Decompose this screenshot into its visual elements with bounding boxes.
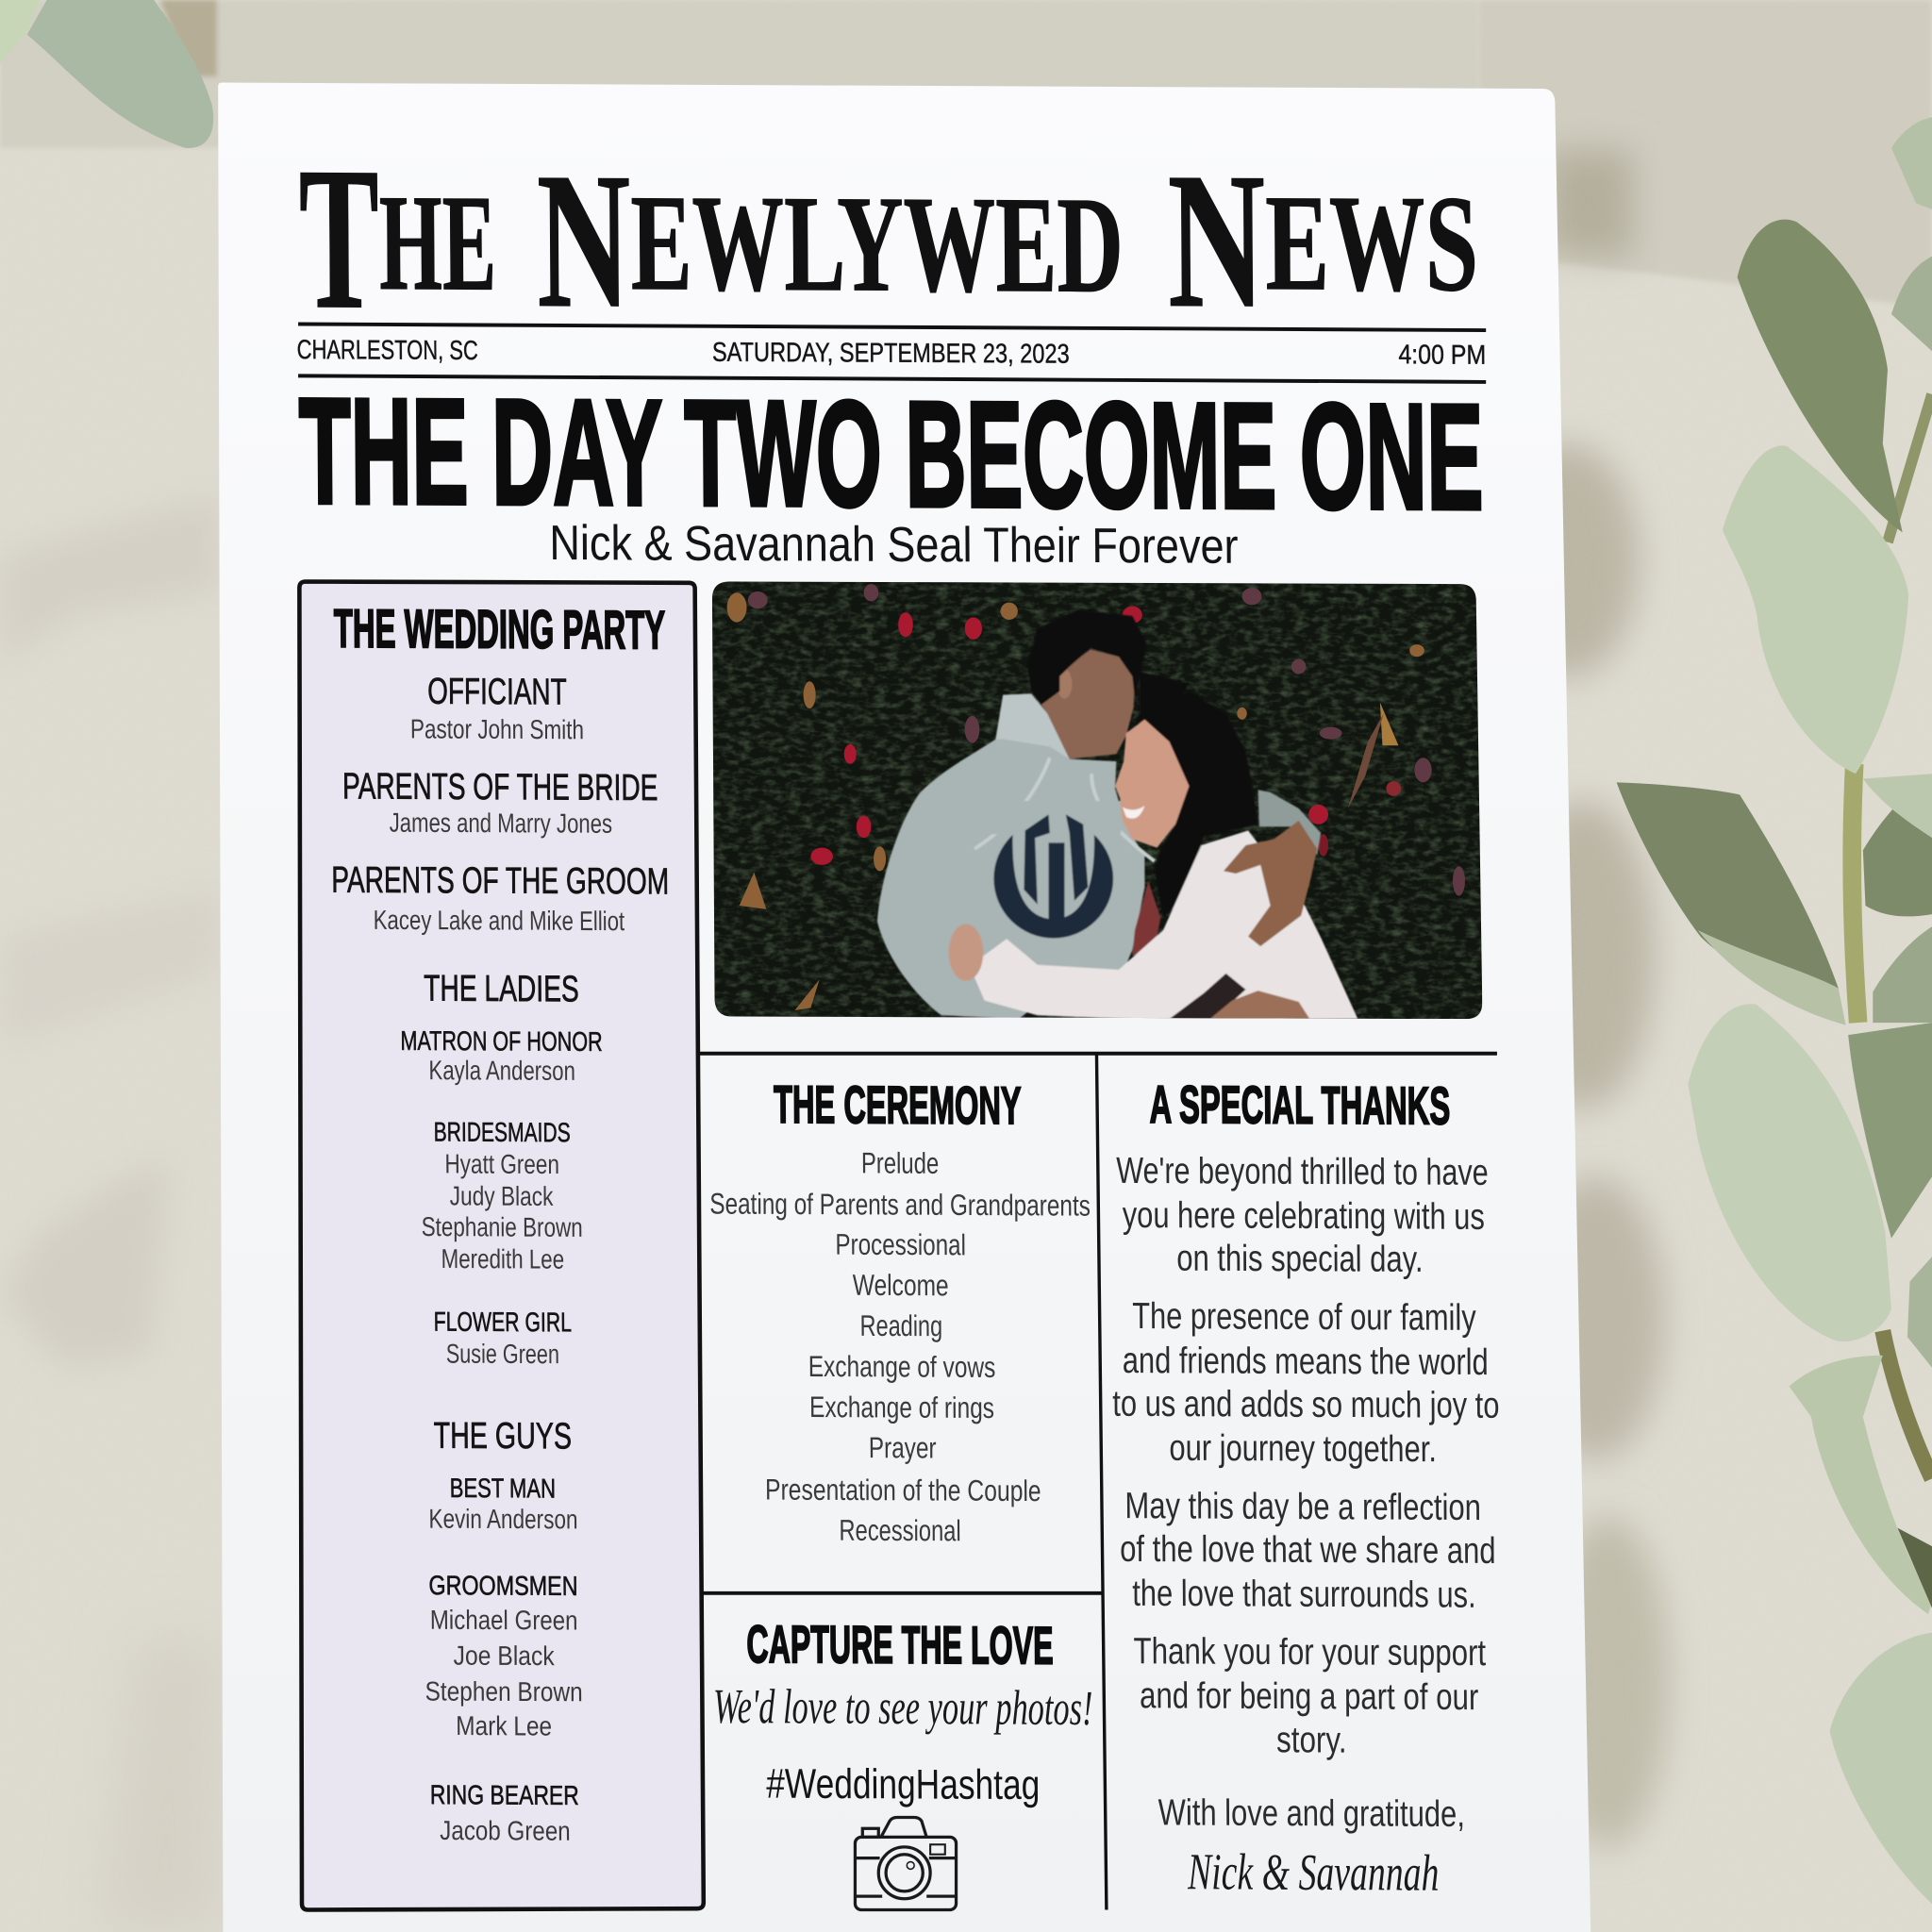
thanks paragraph 3: the love that surrounds us. [1132,1574,1476,1616]
sign-off: Nick & Savannah [1187,1842,1440,1902]
parents of the bride: PARENTS OF THE BRIDE [342,766,658,808]
man: grey hoodie [877,693,1144,1019]
ceremony order list: Presentation of the Couple [765,1474,1041,1507]
thanks paragraph 3: May this day be a reflection [1124,1486,1481,1528]
the guys: Kevin Anderson [428,1505,578,1535]
foliage: top-left leaf [0,0,217,148]
thanks paragraph 2 [1112,1296,1500,1470]
thanks paragraph 2: and friends means the world [1123,1341,1489,1383]
masthead title: N [536,132,631,348]
the ladies [400,969,603,1370]
parents of the bride: James and Marry Jones [390,808,612,840]
heading: capture the love: CAPTURE THE LOVE [746,1614,1054,1675]
ceremony order list: Prayer [869,1431,937,1465]
paper card [218,83,1591,1932]
ceremony order list [709,1146,1091,1547]
parents of the groom: PARENTS OF THE GROOM [331,860,669,902]
the guys: Michael Green [430,1606,578,1637]
the guys: Mark Lee [456,1711,552,1742]
dateline bar: 4:00 PM [1398,340,1486,371]
panel: the wedding party [299,581,704,1909]
the guys: Jacob Green [440,1816,571,1847]
woman: face [1115,720,1189,848]
heading: the ceremony: THE CEREMONY [774,1074,1022,1135]
scarf [1132,881,1160,957]
ceremony order list: Exchange of vows [808,1350,995,1384]
thanks paragraph 4 [1133,1631,1486,1761]
masthead title: HE [378,166,497,320]
dress detail [1170,974,1245,1019]
column rules [700,1054,1497,1909]
the guys: THE GUYS [434,1416,572,1457]
panel: a special thanks [1112,1074,1500,1902]
the guys: RING BEARER [430,1780,579,1811]
thanks paragraph 1: We're beyond thrilled to have [1116,1151,1489,1193]
thanks paragraph 3 [1120,1486,1496,1616]
the ladies: MATRON OF HONOR [400,1026,603,1058]
thanks paragraph 2: to us and adds so much joy to [1112,1384,1500,1426]
sign-off: With love and gratitude, [1158,1792,1465,1835]
officiant: Pastor John Smith [410,714,584,745]
man: neck and face [1041,649,1135,759]
the guys [425,1416,583,1847]
masthead title: EWS [1265,166,1479,320]
the guys: Joe Black [453,1641,555,1672]
ceremony order list: Recessional [839,1514,961,1547]
sign-off [1158,1792,1465,1902]
the guys: GROOMSMEN [428,1571,578,1602]
masthead title: N [1167,132,1266,348]
photo: couple lying on grass [702,573,1491,1029]
officiant [410,672,584,745]
icon: camera [855,1818,957,1909]
thanks paragraph 2: The presence of our family [1132,1296,1476,1339]
man: sleeve around partner [1258,790,1321,855]
ceremony order list: Welcome [853,1269,949,1302]
man: hair [1027,610,1147,705]
the ladies: Meredith Lee [441,1244,564,1275]
thanks paragraph 3: of the love that we share and [1120,1529,1496,1572]
thanks paragraph 2: our journey together. [1169,1428,1437,1470]
subheading: Nick & Savannah Seal Their Forever [549,516,1239,575]
masthead title [298,125,1479,352]
ceremony order list: Reading [859,1309,942,1342]
thanks paragraph 1 [1116,1151,1489,1280]
parents of the groom [331,860,669,937]
dateline bar: SATURDAY, SEPTEMBER 23, 2023 [712,338,1070,370]
dateline bar: CHARLESTON, SC [297,335,478,366]
masthead title: T [298,125,380,352]
hashtag: #WeddingHashtag [766,1761,1040,1808]
thanks paragraph 1: you here celebrating with us [1123,1195,1485,1238]
the ladies: Susie Green [446,1340,559,1370]
ceremony order list: Seating of Parents and Grandparents [709,1188,1091,1223]
script line: We'd love to see your photos! [713,1679,1093,1736]
forearm at bottom [1210,991,1309,1019]
thanks paragraph 1: on this special day. [1176,1239,1424,1280]
parents of the bride [342,766,658,840]
ceremony order list: Prelude [861,1146,939,1180]
foliage: right eucalyptus branch [1617,117,1932,1904]
the ladies: Stephanie Brown [422,1212,583,1243]
hoodie logo [986,801,1122,939]
panel: capture the love [713,1614,1093,1909]
masthead title: EWLYWED [630,166,1124,322]
the ladies: BRIDESMAIDS [434,1117,571,1148]
heading: a special thanks: A SPECIAL THANKS [1149,1074,1450,1136]
ceremony order list: Processional [835,1228,966,1261]
officiant: OFFICIANT [427,672,567,713]
woman: hair [1135,691,1258,918]
woman: hand on hoodie [949,924,983,981]
the ladies: Judy Black [450,1181,554,1212]
panel: the ceremony [709,1074,1091,1547]
the guys: BEST MAN [450,1474,556,1505]
woman: white sweater [973,830,1357,1019]
thanks paragraph 4: Thank you for your support [1133,1631,1486,1674]
the ladies: Hyatt Green [444,1149,559,1180]
the ladies: THE LADIES [424,969,579,1009]
ceremony order list: Exchange of rings [809,1391,994,1424]
parents of the groom: Kacey Lake and Mike Elliot [374,906,625,937]
the ladies: FLOWER GIRL [434,1307,572,1338]
man: hand on shoulder [1224,821,1317,946]
the ladies: Kayla Anderson [428,1056,575,1087]
thanks paragraph 4: story. [1276,1720,1347,1761]
heading: the wedding party: THE WEDDING PARTY [334,599,665,661]
dateline bar [297,325,1486,382]
thanks paragraph 4: and for being a part of our [1140,1675,1478,1718]
the guys: Stephen Brown [425,1676,583,1707]
